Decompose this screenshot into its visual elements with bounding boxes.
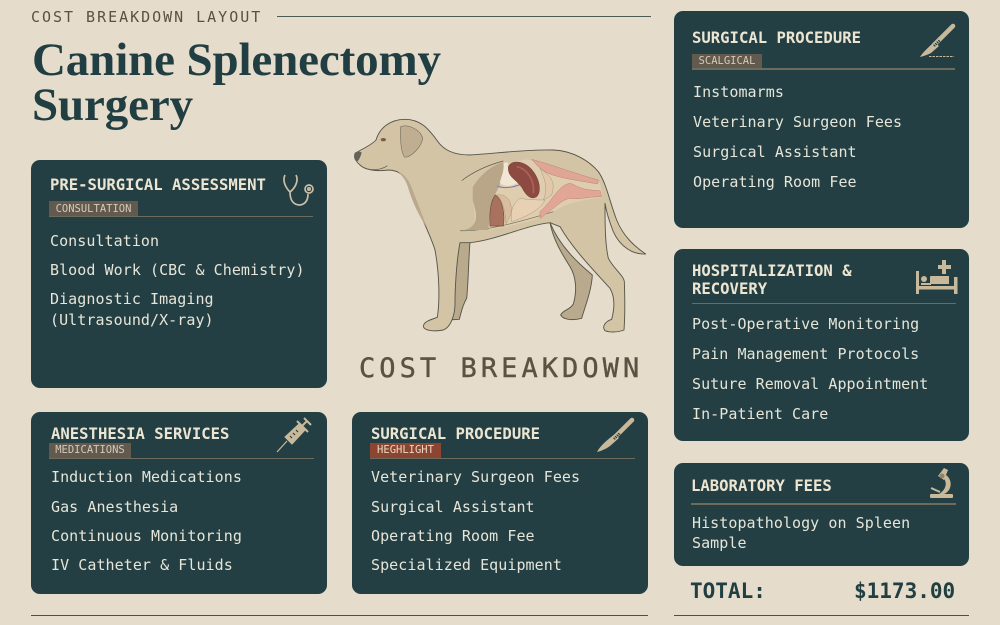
- tag: SCALGICAL: [699, 55, 755, 67]
- eyebrow label: COST BREAKDOWN LAYOUT: [31, 8, 262, 26]
- panel: surgical procedure: [674, 11, 969, 228]
- icon: scalpel: [920, 24, 956, 57]
- heading: SURGICAL PROCEDURE: [692, 29, 861, 47]
- tag: MEDICATIONS: [55, 444, 125, 456]
- heading: RECOVERY: [692, 280, 767, 298]
- list items: Pain Management Protocols: [692, 345, 919, 363]
- list items: [51, 468, 242, 574]
- list items: Specialized Equipment: [371, 556, 562, 574]
- panel: surgical procedure highlight: [352, 412, 648, 594]
- list items: Continuous Monitoring: [51, 527, 242, 545]
- list items: Histopathology on Spleen: [692, 514, 910, 532]
- heading: [692, 262, 852, 298]
- tag: [692, 54, 762, 69]
- heading: SURGICAL PROCEDURE: [371, 425, 540, 443]
- tag: HEGHLIGHT: [377, 444, 434, 456]
- icon: microscope: [930, 468, 953, 498]
- list items: IV Catheter & Fluids: [51, 556, 233, 574]
- list items: Blood Work (CBC & Chemistry): [50, 261, 305, 279]
- list items: [692, 315, 928, 423]
- list items: Sample: [692, 534, 747, 552]
- eyebrow rule: [277, 16, 651, 17]
- panel: hospitalization and recovery: [674, 249, 969, 441]
- heading: HOSPITALIZATION &: [692, 262, 852, 280]
- panel: anesthesia services: [31, 412, 327, 594]
- heading: ANESTHESIA SERVICES: [51, 425, 229, 443]
- icon: stethoscope: [283, 174, 314, 206]
- list items: Consultation: [50, 232, 159, 250]
- total label: TOTAL:: [690, 579, 766, 603]
- list items: [693, 83, 902, 191]
- panel: pre-surgical assessment: [31, 160, 327, 388]
- list items: Induction Medications: [51, 468, 242, 486]
- list items: Surgical Assistant: [371, 498, 535, 516]
- list items: Surgical Assistant: [693, 143, 857, 161]
- list items: Operating Room Fee: [693, 173, 857, 191]
- organs cutaway: [460, 159, 603, 231]
- tag: CONSULTATION: [56, 203, 131, 215]
- list items: Veterinary Surgeon Fees: [693, 113, 902, 131]
- far hind leg: [550, 223, 592, 320]
- icon: scalpel: [597, 418, 634, 452]
- dog body: [355, 119, 646, 332]
- list items: [371, 468, 580, 574]
- illustration: dog anatomy: [354, 118, 646, 332]
- icon: hospital bed: [916, 260, 958, 294]
- chest shadow: [397, 171, 427, 228]
- title: Surgery: [32, 79, 193, 131]
- list items: Operating Room Fee: [371, 527, 535, 545]
- panel: laboratory fees: [674, 463, 969, 566]
- list items: [692, 514, 910, 552]
- tag: [370, 443, 441, 458]
- list items: Diagnostic Imaging: [50, 290, 214, 308]
- list items: [50, 232, 305, 329]
- far fore leg: [448, 240, 470, 320]
- list items: In-Patient Care: [692, 405, 828, 423]
- heading: PRE-SURGICAL ASSESSMENT: [50, 176, 266, 194]
- heading: LABORATORY FEES: [691, 477, 832, 495]
- list items: Post-Operative Monitoring: [692, 315, 919, 333]
- title: Canine Splenectomy: [32, 34, 441, 86]
- tag: [49, 201, 138, 217]
- list items: Suture Removal Appointment: [692, 375, 928, 393]
- list items: (Ultrasound/X-ray): [50, 311, 214, 329]
- eye and nose: [354, 138, 387, 170]
- list items: Veterinary Surgeon Fees: [371, 468, 580, 486]
- list items: Instomarms: [693, 83, 784, 101]
- ear: [400, 126, 423, 157]
- tag: [49, 443, 131, 458]
- list items: Gas Anesthesia: [51, 498, 178, 516]
- title: [32, 34, 441, 131]
- icon: syringe: [276, 417, 312, 452]
- center caption: COST BREAKDOWN: [359, 353, 643, 384]
- total amount: $1173.00: [854, 579, 955, 603]
